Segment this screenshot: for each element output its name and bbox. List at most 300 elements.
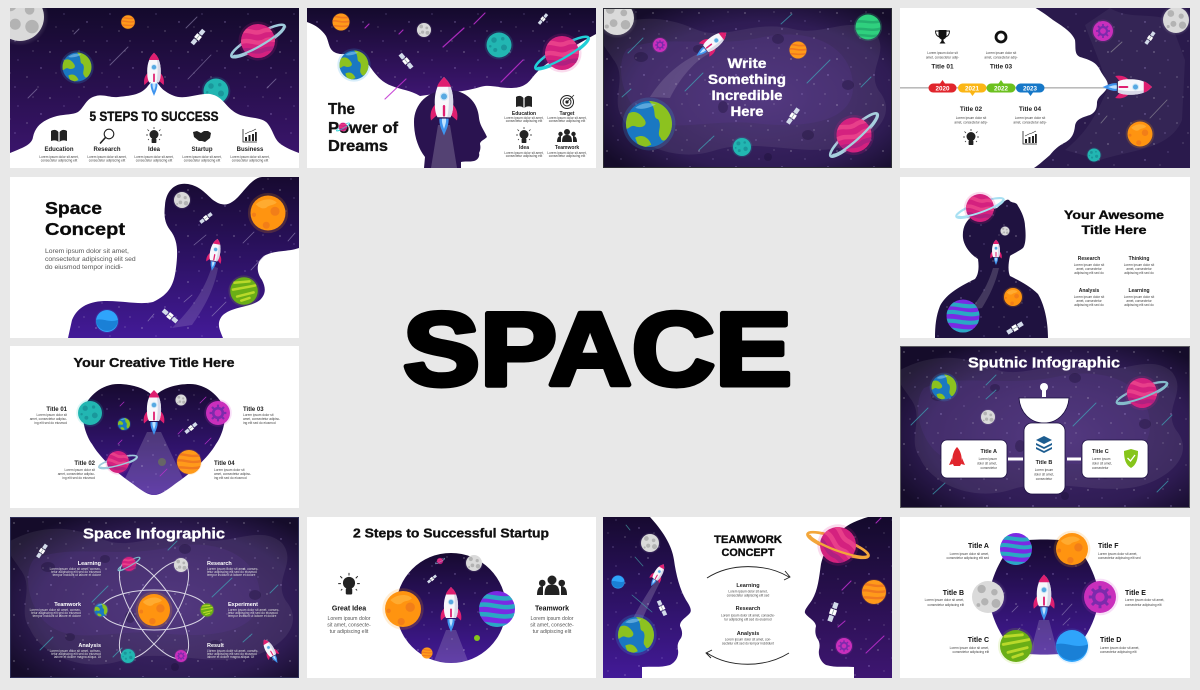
step: education: Lorem ipsum dolor sit amet, — [39, 155, 79, 159]
heading: Your Creative Title Here — [74, 356, 235, 370]
right head silhouette — [805, 517, 892, 678]
icon: rocket — [1033, 575, 1055, 620]
heading: Dreams — [328, 138, 388, 155]
label: title b — [925, 590, 964, 607]
icon: ringed planet — [953, 187, 1007, 229]
item: analysis: sectetur elit sed do tempor incididunt — [722, 642, 774, 646]
label: title e: Lorem ipsum dolor sit amet, — [1125, 598, 1164, 602]
milestone: title 04: amet, consectetur adip- — [1013, 120, 1047, 124]
label: title b: Title B — [943, 590, 964, 597]
item: learning — [727, 583, 769, 598]
label: title 03: Lorem ipsum dolor sit — [243, 413, 274, 417]
block: great idea: sit amet, consecte- — [327, 622, 371, 628]
sky shape — [307, 8, 596, 96]
panel: write something incredible — [603, 8, 892, 168]
item: teamwork: Teamwork — [555, 145, 579, 151]
label: title d: Lorem ipsum dolor sit amet, — [1100, 646, 1139, 650]
icon: moon — [464, 553, 484, 573]
icon: satellite — [398, 52, 414, 70]
icon: orange planet — [248, 193, 288, 233]
connectors — [1008, 458, 1081, 460]
item: thinking: Thinking — [1129, 256, 1149, 262]
item: education: Education — [512, 111, 536, 117]
body text — [45, 248, 136, 271]
step: startup: Lorem ipsum dolor sit amet, — [182, 155, 222, 159]
icon: teal planet — [120, 648, 136, 664]
milestone: title 03 — [984, 32, 1018, 70]
step: business: consectetur adipiscing elit — [232, 158, 268, 162]
item: analysis: Lorem ipsum dolor sit — [1074, 295, 1104, 299]
icon: moon — [980, 409, 996, 425]
item: education — [504, 96, 544, 123]
heading: Your Awesome — [1064, 208, 1164, 222]
label: title e — [1125, 590, 1164, 607]
label: title c: Title C — [968, 637, 989, 644]
icon: satellite — [184, 422, 198, 434]
rocket trail — [172, 266, 218, 328]
space shape — [68, 177, 299, 338]
item: learning: Learning — [736, 583, 760, 589]
step: business: Business — [237, 147, 264, 153]
label: title f: Lorem ipsum dolor sit amet, — [1098, 552, 1137, 556]
icon: moon — [174, 393, 188, 407]
item: analysis: Analysis — [1079, 288, 1099, 294]
icon: teal planet — [485, 31, 513, 59]
step: idea — [134, 127, 174, 162]
panel: 2 steps to successful startup — [307, 517, 596, 678]
label: title 03: amet, consectetur adipisc- — [243, 417, 280, 421]
item: thinking — [1124, 256, 1154, 275]
heading: Here — [730, 103, 764, 119]
label: result: labore et dolore magna aliqua. Ut — [207, 655, 254, 659]
icon: gear planet — [652, 37, 668, 53]
arrow: bottom — [706, 650, 789, 664]
label: research: tetur adipiscing elit sed do eiusmod — [207, 570, 257, 574]
rocket trail — [970, 268, 999, 310]
label: title c — [950, 637, 989, 654]
icon: gear planet — [204, 399, 232, 427]
icon: satellite — [1144, 31, 1156, 45]
item: thinking: adipiscing elit sed do — [1124, 271, 1154, 275]
icon: satellite — [656, 600, 668, 616]
icon: gear planet — [174, 649, 188, 663]
label: learning: tetur adipiscing elit sed do eiusmod — [51, 570, 101, 574]
item: learning: Lorem ipsum dolor sit — [1124, 295, 1154, 299]
label: title f: consectetur adipiscing elit sed — [1098, 556, 1141, 560]
icon: gear planet — [835, 637, 853, 655]
icon: satellite — [161, 308, 179, 324]
block: teamwork: Lorem ipsum dolor — [531, 616, 574, 622]
year: 2022 — [986, 80, 1016, 92]
icon: satellite — [537, 13, 549, 25]
item: idea: Lorem ipsum dolor sit amet, — [504, 151, 544, 155]
icon: orange planet — [1003, 287, 1023, 307]
icon: rocket — [259, 636, 283, 666]
item: thinking: amet, consectetur — [1126, 267, 1153, 271]
label: title f — [1098, 543, 1141, 560]
label: experiment: tempor incidunt ut labore et dolore — [228, 614, 277, 618]
main title: SPACE — [403, 292, 792, 408]
label: title b: consectetur adipiscing elit — [928, 603, 964, 607]
rocket beam — [122, 432, 186, 495]
icon: orange planet — [176, 449, 202, 475]
item: research: Research — [1078, 256, 1100, 262]
milestone: title 04 — [1013, 106, 1047, 144]
label: title e: consectetur adipiscing elit — [1125, 603, 1162, 607]
item: research: amet, consectetur — [1076, 267, 1103, 271]
year: 2023 — [1016, 84, 1044, 96]
icon: striped planet — [998, 533, 1034, 565]
icon: moon — [173, 557, 189, 573]
panel: teamwork concept — [603, 517, 892, 678]
icon: earth — [94, 603, 108, 617]
block: teamwork: sit amet, consecte- — [530, 622, 574, 628]
label: research: tempor incidunt ut labore et dolore — [207, 573, 256, 577]
item: learning: consectetur adipiscing elit sed — [727, 594, 769, 598]
step: education — [39, 130, 79, 162]
icon: moon — [416, 22, 432, 38]
icon: gear planet — [1092, 20, 1114, 42]
item: learning — [1124, 288, 1154, 307]
rocket trail — [632, 580, 660, 620]
milestone: title 04: Title 04 — [1019, 106, 1042, 113]
item: analysis — [1074, 288, 1104, 307]
heading: Title Here — [1082, 223, 1147, 237]
icon: blue planet — [611, 575, 625, 589]
icon: earth — [623, 98, 675, 150]
icon: rocket — [144, 390, 164, 435]
atom orbits — [101, 551, 207, 669]
icon: teal planet — [202, 77, 230, 105]
heading: Write — [728, 55, 767, 71]
rocket beam — [434, 630, 468, 663]
item: research: tur adipiscing elit sed do eiusmod — [724, 618, 772, 622]
icon: rocket — [431, 77, 457, 136]
icon: ringed planet — [801, 507, 875, 583]
block: teamwork — [530, 576, 574, 635]
icon: orange planet — [332, 13, 350, 31]
icon: orange planet — [1126, 120, 1154, 148]
label: title 01: Lorem ipsum dolor sit — [37, 413, 67, 417]
rocket beam — [1030, 620, 1058, 654]
icon: striped planet — [477, 591, 517, 627]
item: research — [721, 606, 775, 622]
block: great idea — [327, 573, 371, 635]
step: idea: Lorem ipsum dolor sit amet, — [134, 155, 174, 159]
year: 2021: 2021 — [965, 85, 979, 92]
body text: do eiusmod tempor incidi- — [45, 264, 123, 271]
label: title 02 — [58, 461, 96, 480]
body text: Lorem ipsum dolor sit amet, — [45, 248, 129, 255]
item: analysis: amet, consectetur — [1076, 299, 1103, 303]
label: title d: Title D — [1100, 637, 1121, 644]
heading: 2 Steps to Successful Startup — [353, 526, 549, 540]
step: business: Lorem ipsum dolor sit amet, — [230, 155, 270, 159]
milestone: title 01 — [926, 30, 959, 70]
heading: Space — [45, 198, 102, 218]
space shape — [1034, 7, 1190, 168]
icon: rocket — [646, 561, 669, 589]
box: title b: Title B — [1036, 460, 1052, 466]
icon: teal planet — [732, 137, 752, 157]
box: title b: Lorem ipsum — [1035, 468, 1054, 472]
box: title b — [1024, 423, 1065, 494]
heart shape — [83, 384, 225, 495]
item: target — [547, 95, 587, 123]
label: title 03: Title 03 — [243, 407, 264, 413]
label: teamwork: Lorem ipsum dolor sit amet, consec- — [30, 608, 81, 612]
year: 2021 — [958, 84, 986, 96]
item: teamwork — [547, 129, 587, 158]
block: great idea: Lorem ipsum dolor — [328, 616, 371, 622]
label: teamwork: Teamwork — [54, 602, 82, 608]
label: learning: Learning — [78, 561, 101, 567]
box: title b: dolor sit amet, — [1034, 472, 1054, 476]
body text: consectetur adipiscing elit sed — [45, 256, 136, 263]
heading: Concept — [45, 219, 125, 239]
label: title 03 — [243, 407, 280, 425]
label: learning: Lorem ipsum dolor sit amet, consec- — [50, 567, 101, 571]
item: research: adipiscing elit sed do — [1074, 271, 1104, 275]
step: startup: consectetur adipiscing elit — [184, 158, 220, 162]
panel: space concept — [10, 177, 299, 338]
icon: rocket — [441, 587, 461, 632]
icon: moon — [1000, 226, 1010, 236]
icon: green planet — [998, 628, 1034, 664]
icon: satellite — [199, 212, 213, 224]
label: title c: consectetur adipiscing elit — [952, 650, 989, 654]
label: title 04: ing elit sed do eiusmod — [214, 476, 247, 480]
icon: moon — [1160, 4, 1192, 36]
box: title c — [1082, 440, 1148, 478]
item: thinking: Lorem ipsum dolor sit — [1124, 263, 1154, 267]
heading: CONCEPT — [722, 547, 775, 559]
timeline line — [900, 87, 1108, 89]
heading: Sputnic Infographic — [968, 354, 1120, 372]
central scene — [988, 540, 1100, 654]
label: analysis: Lorem ipsum dolor sit amet, consec- — [50, 649, 101, 653]
heading: Power of — [328, 120, 399, 137]
head silhouette — [414, 90, 487, 168]
label: title 02: ing elit sed do eiusmod — [62, 476, 95, 480]
label: result: Result — [207, 643, 224, 649]
icon: green planet — [854, 13, 882, 41]
icon: ringed planet — [820, 108, 888, 162]
icon: moon — [172, 190, 192, 210]
label: learning — [50, 561, 101, 577]
heading: Space Infographic — [83, 526, 225, 542]
label: title b: Lorem ipsum dolor sit amet, — [925, 598, 964, 602]
satellite dish — [1019, 383, 1069, 423]
label: title 01: amet, consectetur adipisc- — [30, 417, 67, 421]
icon: earth — [117, 417, 131, 431]
label: title 04 — [214, 461, 251, 480]
item: analysis: Analysis — [737, 631, 759, 637]
label: experiment: tetur adipiscing elit sed do eiusmod — [228, 611, 278, 615]
label: result — [207, 643, 258, 659]
box: title a: Lorem ipsum — [979, 457, 997, 461]
icon: blue planet — [1054, 628, 1090, 664]
step: research: Lorem ipsum dolor sit amet, — [87, 155, 127, 159]
panel: your creative title — [10, 346, 299, 508]
icon: ringed planet — [96, 444, 140, 480]
icon: red planet — [421, 647, 433, 659]
panel: timeline — [900, 8, 1190, 168]
label: research: Research — [207, 561, 232, 567]
icon: gear planet — [1082, 579, 1118, 615]
milestone: title 01: Lorem ipsum dolor sit — [927, 51, 958, 55]
label: research — [207, 561, 258, 577]
item: research: Lorem ipsum dolor sit amet, consecte- — [721, 614, 775, 618]
item: learning: Lorem ipsum dolor sit amet, — [728, 590, 768, 594]
heading — [714, 534, 782, 559]
label: title a: consectetur adipiscing elit sed — [946, 556, 989, 560]
step: startup — [182, 131, 222, 162]
label: title 01 — [30, 407, 68, 425]
block: great idea: tur adipiscing elit — [330, 629, 369, 635]
icon: moon — [639, 532, 661, 554]
item: education: Lorem ipsum dolor sit amet, — [504, 116, 544, 120]
milestone: title 02: Title 02 — [960, 106, 983, 113]
label: title 02: Lorem ipsum dolor sit — [65, 468, 95, 472]
label: teamwork: tetur adipiscing elit sed do eiusmod — [31, 611, 81, 615]
item: teamwork: Lorem ipsum dolor sit amet, — [547, 151, 587, 155]
step: idea: Idea — [148, 147, 161, 153]
icon: earth — [337, 48, 371, 82]
item: research: Research — [736, 606, 761, 612]
panel: 5 steps to success — [10, 8, 299, 168]
icon: earth — [615, 614, 657, 656]
icon: green planet — [228, 275, 260, 307]
item: teamwork: consectetur adipiscing elit — [549, 154, 585, 158]
label: experiment — [228, 602, 279, 618]
label: title c: Lorem ipsum dolor sit amet, — [950, 646, 989, 650]
step: idea: consectetur adipiscing elit — [136, 158, 172, 162]
icon: rocket — [990, 240, 1002, 265]
label: analysis: labore et dolore magna aliqua. Ut — [54, 655, 101, 659]
label: analysis: Analysis — [78, 643, 101, 649]
icon: central sun — [136, 592, 172, 628]
step: education: Education — [44, 147, 74, 153]
panel: sputnic infographic — [900, 346, 1190, 508]
icon: ringed planet — [1113, 371, 1171, 415]
item: education: consectetur adipiscing elit — [506, 119, 542, 123]
step: business — [230, 129, 270, 162]
item: research: Lorem ipsum dolor sit — [1074, 263, 1104, 267]
milestone: title 02: amet, consectetur adip- — [954, 120, 988, 124]
icon: rocket — [691, 26, 732, 63]
icon: small planet in heading — [336, 122, 350, 132]
person silhouette — [935, 200, 1048, 338]
box: title c: dolor sit amet, — [1092, 462, 1112, 466]
label: title a: Title A — [968, 543, 989, 550]
label: title 03: ing elit sed do eiusmod — [243, 421, 276, 425]
circle scene — [396, 553, 506, 663]
milestone: title 01: Title 01 — [931, 64, 954, 70]
icon: satellite — [36, 543, 48, 559]
heading: TEAMWORK — [714, 534, 782, 546]
heading — [45, 198, 125, 239]
box: title a: dolor sit amet, — [977, 462, 997, 466]
label: result: Lorem ipsum dolor sit amet, consec- — [207, 649, 258, 653]
milestone: title 02 — [954, 106, 988, 145]
icon: ringed planet — [228, 20, 288, 62]
heading: Incredible — [712, 87, 783, 103]
icon: rocket — [144, 53, 164, 96]
icon: earth — [930, 373, 958, 401]
label: result: tetur adipiscing elit sed do eiusmod — [207, 652, 257, 656]
icon: satellite — [827, 602, 839, 622]
label: experiment: Experiment — [228, 602, 258, 608]
heading — [328, 101, 399, 155]
rocket trail — [650, 49, 712, 98]
label: title 04: Title 04 — [214, 461, 235, 467]
year: 2022: 2022 — [994, 85, 1008, 92]
panel: six planets — [900, 517, 1190, 678]
step: research: consectetur adipiscing elit — [89, 158, 125, 162]
icon: satellite — [190, 28, 206, 46]
icon: moon — [969, 578, 1007, 616]
box: title b: consectetur — [1036, 477, 1053, 481]
icon: grey planet — [158, 458, 166, 466]
icon: earth — [60, 50, 94, 84]
item: learning: amet, consectetur — [1126, 299, 1153, 303]
heading — [1064, 208, 1164, 237]
label: title 02: amet, consectetur adipisc- — [58, 472, 95, 476]
block: teamwork: tur adipiscing elit — [533, 629, 572, 635]
item: target: Lorem ipsum dolor sit amet, — [547, 116, 587, 120]
icon: striped planet — [945, 300, 981, 332]
icon: ringed planet — [117, 555, 141, 573]
icon: satellite — [1006, 321, 1024, 335]
icon: small green planet — [474, 635, 480, 641]
item: learning: adipiscing elit sed do — [1124, 303, 1154, 307]
milestone: title 01: amet, consectetur adip- — [926, 56, 959, 60]
icon: small ringed planet — [435, 557, 445, 565]
label: title 02: Title 02 — [74, 461, 96, 467]
panel: your awesome title — [900, 177, 1190, 338]
heading: Something — [708, 71, 786, 87]
icon: orange planet — [121, 15, 135, 29]
label: title d — [1100, 637, 1139, 654]
step: startup: Startup — [192, 147, 213, 153]
item: analysis: adipiscing elit sed do — [1074, 303, 1104, 307]
label: title f: Title F — [1098, 543, 1119, 550]
icon: moon — [0, 0, 49, 46]
label: title 04: amet, consectetur adipisc- — [214, 472, 251, 476]
year: 2023: 2023 — [1023, 85, 1037, 92]
heading: 5 STEPS TO SUCCESS — [90, 109, 218, 124]
heading: The — [328, 101, 355, 118]
milestone: title 02: Lorem ipsum dolor sit — [956, 116, 986, 120]
label: learning: tempor incidunt ut labore et dolore — [53, 573, 101, 577]
box: title a: Title A — [980, 449, 997, 455]
block: great idea: Great Idea — [332, 606, 366, 612]
label: title a — [946, 543, 989, 560]
item: target: consectetur adipiscing elit — [549, 119, 585, 123]
item: analysis: Lorem ipsum dolor sit amet, con- — [725, 638, 771, 642]
item: target: Target — [560, 111, 575, 117]
step: research: Research — [93, 147, 121, 153]
icon: satellite — [427, 574, 437, 584]
step: education: consectetur adipiscing elit — [41, 158, 77, 162]
icon: satellite — [785, 107, 801, 125]
item: idea: Idea — [519, 145, 529, 151]
label: experiment: Lorem ipsum dolor sit amet, consec- — [228, 608, 279, 612]
item: learning: Learning — [1128, 288, 1150, 294]
icon: orange planet — [382, 588, 424, 630]
milestone: title 03: amet, consectetur adip- — [984, 56, 1018, 60]
